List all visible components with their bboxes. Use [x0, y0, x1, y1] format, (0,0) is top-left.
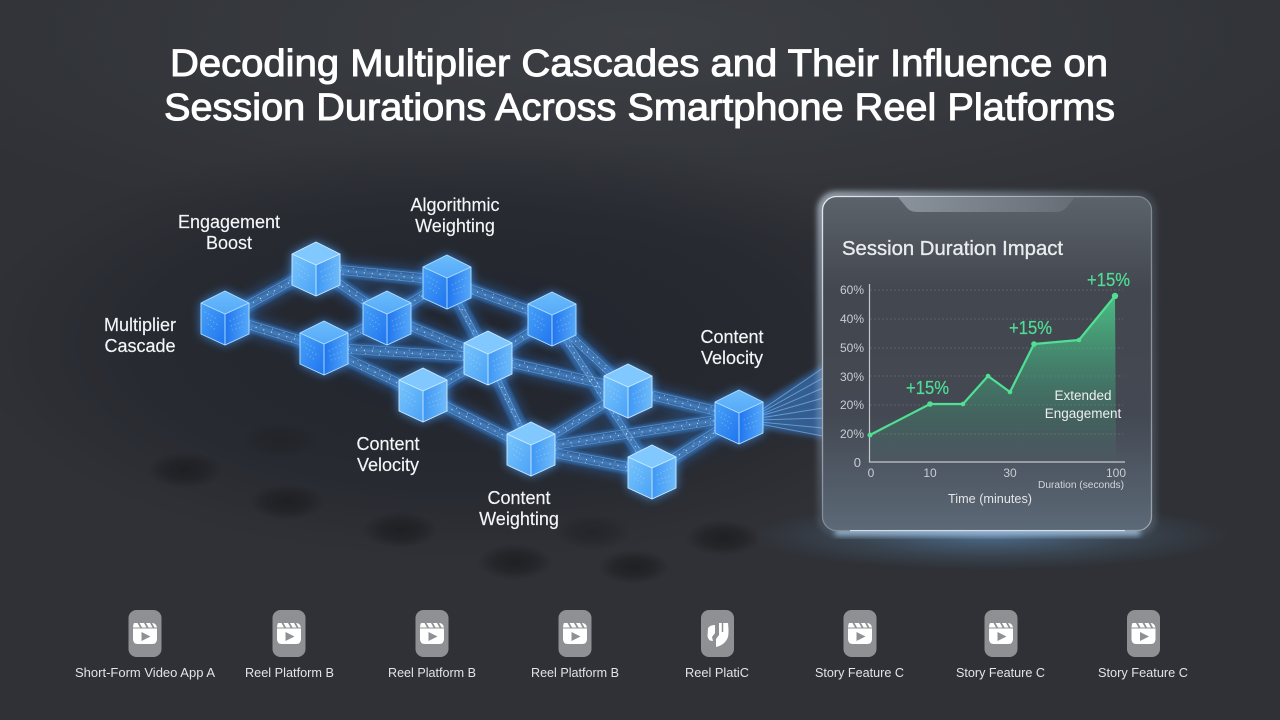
platform: reel platform B third: Reel Platform B: [531, 665, 619, 680]
platform: reel platform B second: Reel Platform B: [388, 665, 476, 680]
y axis labels: 60%: [840, 283, 864, 297]
annotation: extended engagement: Engagement: [1045, 406, 1122, 421]
label: content velocity lower: Velocity: [357, 455, 419, 475]
x axis labels: [868, 466, 1126, 480]
y axis labels: 0: [854, 455, 861, 470]
+15% callouts: +15%: [1009, 318, 1052, 338]
platform: story feature C: Story Feature C: [815, 665, 904, 680]
label: content weighting: Content: [487, 488, 551, 508]
platform: reel platform B: [245, 610, 334, 680]
label: algorithmic weighting: Algorithmic: [410, 195, 500, 215]
label: algorithmic weighting: Weighting: [415, 216, 495, 236]
label: content velocity right: Velocity: [701, 348, 763, 368]
axis titles: Duration (seconds): [1038, 480, 1124, 491]
x axis labels: 0: [868, 466, 875, 480]
network labels: [104, 195, 764, 529]
platform: reel platic: [685, 610, 749, 680]
y axis labels: 50%: [840, 341, 864, 355]
label: multiplier cascade: Multiplier: [104, 315, 176, 335]
+15% callouts: +15%: [1087, 270, 1130, 290]
cascade network links: [224, 263, 740, 476]
platform: story feature C third: [1098, 610, 1188, 680]
label: engagement boost: Engagement: [178, 212, 280, 232]
title: Decoding Multiplier Cascades and Their Influence on: [170, 43, 1108, 85]
network nodes (cubes): [201, 242, 763, 499]
platform: story feature C second: [956, 610, 1045, 680]
label: multiplier cascade: Cascade: [104, 336, 176, 356]
platform: story feature C second: Story Feature C: [956, 665, 1045, 680]
platform: story feature C third: Story Feature C: [1098, 665, 1188, 680]
light beams into panel: [758, 364, 825, 438]
panel: session duration impact: [821, 195, 1153, 536]
y axis labels: 20%: [840, 427, 864, 441]
+15% callouts: [906, 270, 1130, 398]
y axis labels: 40%: [840, 312, 864, 326]
x axis labels: 100: [1106, 466, 1126, 480]
title: Session Durations Across Smartphone Reel Platforms: [164, 87, 1115, 129]
+15% callouts: +15%: [906, 378, 949, 398]
x axis labels: 10: [923, 466, 937, 480]
platform: reel platic: Reel PlatiC: [685, 665, 749, 680]
line chart: [840, 270, 1130, 506]
data line: [870, 296, 1115, 435]
platform: reel platform B: Reel Platform B: [245, 665, 334, 680]
platform: story feature C: [815, 610, 904, 680]
x axis labels: 30: [1003, 466, 1017, 480]
label: engagement boost: Boost: [206, 233, 252, 253]
axis titles: Time (minutes): [948, 491, 1032, 506]
data points: [868, 293, 1118, 438]
label: content velocity right: Content: [700, 327, 764, 347]
platform: reel platform B third: [531, 610, 619, 680]
axis titles: [948, 480, 1124, 506]
platform row: [75, 610, 1188, 680]
axes: [870, 284, 1125, 462]
panel heading: Session Duration Impact: [842, 237, 1063, 260]
platform: short-form video app A: Short-Form Video App A: [75, 665, 215, 680]
y axis labels: 30%: [840, 370, 864, 384]
title: [164, 43, 1115, 129]
annotation: extended engagement: Extended: [1054, 388, 1112, 403]
y axis labels: [840, 283, 864, 470]
y axis labels: 20%: [840, 398, 864, 412]
label: content velocity lower: Content: [356, 434, 420, 454]
platform: reel platform B second: [388, 610, 476, 680]
floor shadows: [147, 422, 761, 584]
area under line: [870, 296, 1116, 462]
platform: short-form video app A: [75, 610, 215, 680]
label: content weighting: Weighting: [479, 509, 559, 529]
